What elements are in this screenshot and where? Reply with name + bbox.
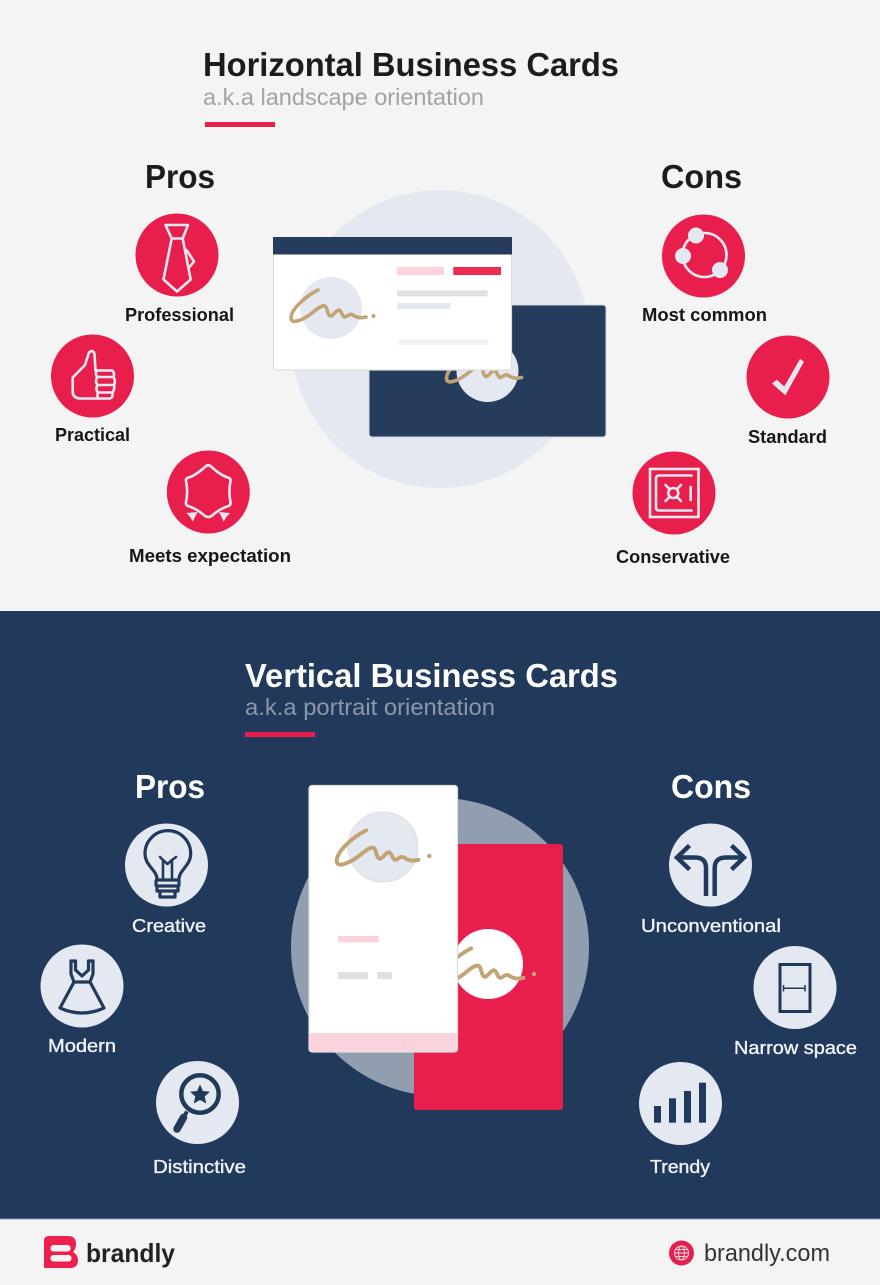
item: modern: [40, 944, 124, 1056]
title: vertical: Vertical Business Cards: [245, 657, 618, 694]
back card: [414, 844, 563, 1110]
illustration: vertical cards: [291, 786, 589, 1110]
front card: [309, 786, 458, 1052]
icon: rosette badge: [186, 465, 231, 522]
icon: light bulb: [145, 831, 191, 897]
item: distinctive: Distinctive: [153, 1157, 246, 1177]
icon: safe: [650, 469, 698, 517]
icon: tie: [164, 225, 194, 292]
item: conservative: Conservative: [616, 547, 730, 567]
item: conservative: [616, 452, 730, 567]
logo: brandly: brandly: [86, 1238, 175, 1268]
subtitle: horizontal: a.k.a landscape orientation: [203, 84, 484, 110]
item: distinctive: [153, 1061, 246, 1177]
item: trendy: Trendy: [650, 1157, 710, 1177]
item: meets expectation: [129, 450, 291, 566]
heading: pros: Pros: [145, 158, 215, 195]
icon: rising bars: [654, 1083, 706, 1123]
item: most common: Most common: [642, 305, 767, 325]
heading: cons: Cons: [671, 768, 751, 805]
item: standard: Standard: [748, 427, 827, 447]
item: creative: Creative: [132, 916, 206, 936]
panel: vertical business cards: [0, 611, 880, 1219]
subtitle: vertical: a.k.a portrait orientation: [245, 694, 495, 720]
website: brandly.com: brandly.com: [704, 1240, 830, 1267]
item: standard: [746, 336, 830, 447]
title: horizontal: Horizontal Business Cards: [203, 46, 619, 83]
item: unconventional: Unconventional: [641, 916, 781, 936]
icon: dress: [60, 961, 104, 1013]
item: professional: Professional: [125, 305, 234, 325]
back card: [369, 305, 606, 437]
item: narrow space: Narrow space: [734, 1038, 857, 1058]
heading: cons: Cons: [661, 158, 742, 195]
icon: magnifier with star: [177, 1075, 219, 1129]
heading: pros: Pros: [135, 768, 205, 805]
icon: check mark: [772, 359, 804, 395]
item: professional: [125, 214, 234, 325]
item: modern: Modern: [48, 1036, 116, 1056]
icon: split arrows: [677, 846, 744, 896]
item: meets expectation: Meets expectation: [129, 546, 291, 566]
item: narrow space: [734, 946, 857, 1058]
icon: connected nodes: [675, 228, 728, 278]
icon: globe: [674, 1246, 688, 1260]
icon: thumbs up: [73, 351, 115, 398]
panel: horizontal business cards: [0, 0, 880, 611]
item: creative: [125, 824, 208, 936]
item: trendy: [639, 1062, 722, 1177]
footer: [0, 1218, 880, 1285]
icon: narrow door: [780, 964, 810, 1012]
logo: brandly: [44, 1236, 175, 1268]
item: unconventional: [641, 824, 781, 936]
illustration: horizontal cards: [273, 190, 606, 488]
item: practical: [51, 334, 134, 445]
item: most common: [642, 214, 767, 325]
item: practical: Practical: [55, 425, 130, 445]
front card: [273, 237, 512, 370]
